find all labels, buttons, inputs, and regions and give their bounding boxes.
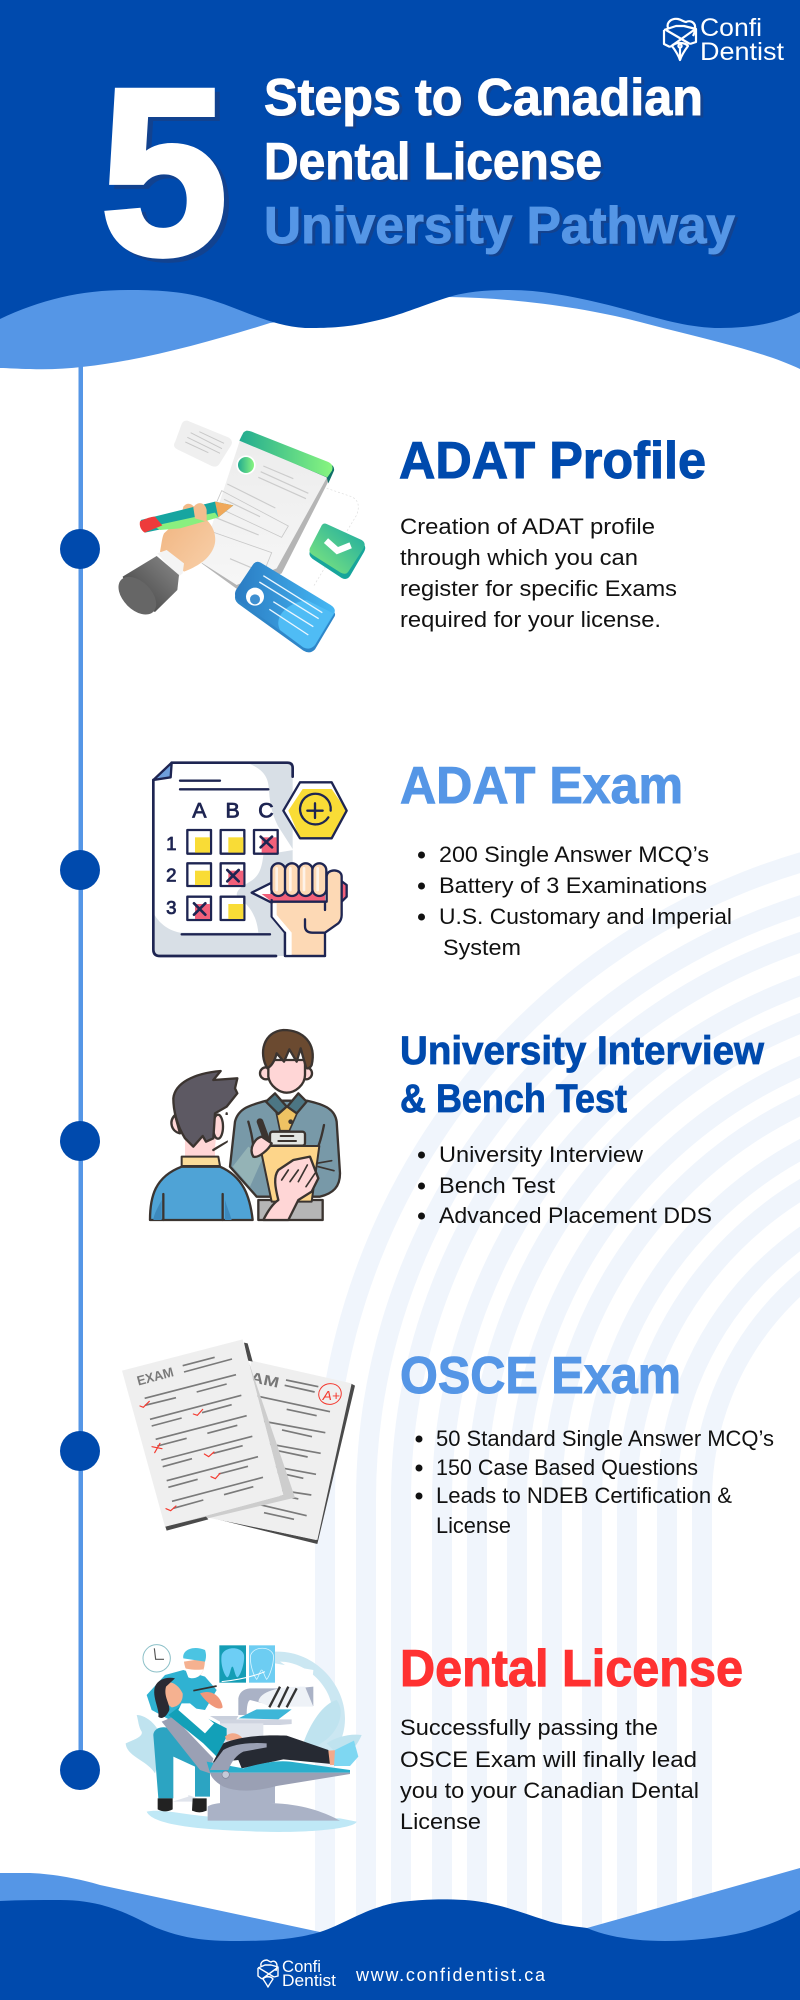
list: OSCE Exam details <box>416 1426 774 1538</box>
heading: University Interview & Bench Test: & Bench Test <box>400 1077 627 1121</box>
applicant body <box>150 1167 253 1220</box>
hand <box>160 504 215 572</box>
answer letters: A <box>192 798 207 822</box>
background: concentric arc stripes <box>325 835 800 2000</box>
chair back <box>162 1717 213 1773</box>
clipboard <box>260 1146 319 1202</box>
list: OSCE Exam details: 50 Standard Single Answer MCQ’s <box>436 1426 774 1451</box>
text: Dental License description: Successfully passing the <box>400 1715 658 1740</box>
front paper shadow <box>165 1361 295 1527</box>
text: ADAT Profile description: register for specific Exams <box>400 576 677 601</box>
applicant hair <box>173 1071 237 1147</box>
answer boxes <box>187 830 278 920</box>
heading: Dental License: Dental License <box>400 1640 743 1698</box>
patient legs <box>213 1735 332 1768</box>
timeline dot 4 <box>60 1431 100 1471</box>
unit arm <box>238 1687 313 1715</box>
floor shadow <box>147 1811 357 1832</box>
icon: tooth and pen nib <box>664 19 696 60</box>
text: ADAT Profile description: through which you can <box>400 545 638 570</box>
footer band <box>0 1899 800 2000</box>
applicant collar <box>182 1157 220 1166</box>
text: Dental License description: License <box>400 1809 481 1834</box>
text: Dental License description: you to your Canadian Dental <box>400 1778 699 1803</box>
chair post and base <box>220 1780 275 1803</box>
sleeve <box>123 556 179 612</box>
list: University Interview details: Bench Test <box>439 1173 555 1198</box>
logo: top: Dentist <box>700 38 784 66</box>
fingertip over pencil <box>193 503 207 522</box>
cuff <box>157 550 184 577</box>
pen and hand <box>260 1122 267 1140</box>
dentist legs and stool <box>173 1760 207 1802</box>
answer letters: B <box>226 798 240 822</box>
clock <box>143 1645 170 1672</box>
heading: University Interview & Bench Test <box>400 1029 765 1121</box>
icon: exam papers: EXAM <box>135 1364 175 1389</box>
heading: ADAT Profile: ADAT Profile <box>399 432 706 490</box>
icon: ADAT profile form <box>111 421 365 652</box>
icon: exam papers: AM <box>249 1370 281 1392</box>
heading: University Interview & Bench Test: University Interview <box>400 1029 765 1073</box>
title <box>264 69 735 255</box>
list: OSCE Exam details: License <box>436 1513 511 1538</box>
text: ADAT Profile description: Creation of ADAT profile <box>400 514 655 539</box>
icon: exam papers <box>122 1339 355 1544</box>
list: University Interview details: University Interview <box>439 1142 643 1167</box>
icon: ADAT exam sheet <box>153 763 347 956</box>
heading: ADAT Exam: ADAT Exam <box>400 757 683 815</box>
icon: dental clinic scene <box>126 1645 362 1832</box>
timeline dot 1 <box>60 529 100 569</box>
title: Steps to Canadian <box>264 69 703 127</box>
big numeral 5: 5 <box>100 40 228 305</box>
timeline dot 2 <box>60 850 100 890</box>
timeline dot 5 <box>60 1750 100 1790</box>
seat <box>207 1761 350 1773</box>
dentist head <box>184 1658 205 1677</box>
list: University Interview details: Advanced Placement DDS <box>439 1203 712 1228</box>
front paper edges <box>165 1343 253 1531</box>
interviewer head <box>260 1067 272 1079</box>
x-ray panels <box>219 1645 246 1683</box>
list: ADAT Exam details: System <box>443 935 521 960</box>
answer letters: 1 <box>166 833 177 854</box>
list: University Interview details <box>418 1142 712 1228</box>
text: Dental License description <box>400 1715 699 1834</box>
patient head <box>163 1682 183 1707</box>
check tile <box>309 526 365 579</box>
list: OSCE Exam details: Leads to NDEB Certification & <box>436 1483 732 1508</box>
timeline dot 3 <box>60 1121 100 1161</box>
blue card <box>235 565 335 652</box>
patient torso <box>168 1705 227 1757</box>
answer letters: C <box>258 798 274 822</box>
heading: OSCE Exam: OSCE Exam <box>400 1347 681 1405</box>
logo: top <box>664 14 784 66</box>
timeline <box>60 360 100 1790</box>
pencil <box>141 502 233 533</box>
icon: tooth and pen nib small <box>258 1960 278 1987</box>
fist and pencil <box>252 883 272 903</box>
list: ADAT Exam details: U.S. Customary and Imperial <box>439 904 732 929</box>
text: ADAT Profile description <box>400 514 677 632</box>
list: ADAT Exam details: Battery of 3 Examinations <box>439 873 707 898</box>
website url: www.confidentist.ca <box>355 1965 546 1985</box>
interviewer body <box>230 1101 340 1197</box>
back paper <box>207 1383 355 1544</box>
icon: university interview <box>150 1030 340 1220</box>
backdrop globe <box>275 1652 345 1753</box>
interviewer trousers <box>258 1200 323 1220</box>
leaves <box>126 1715 163 1773</box>
logo: footer: Confi <box>282 1957 321 1976</box>
dashed connector <box>313 488 358 587</box>
logo: footer <box>258 1957 336 1990</box>
text: ADAT Profile description: required for your license. <box>400 607 661 632</box>
list: ADAT Exam details <box>418 842 732 960</box>
icon: exam papers: A+ <box>322 1388 340 1403</box>
logo: footer: Dentist <box>282 1971 336 1990</box>
title: University Pathway <box>264 197 735 255</box>
list: ADAT Exam details: 200 Single Answer MCQ’s <box>439 842 709 867</box>
text: Dental License description: OSCE Exam will finally lead <box>400 1747 697 1772</box>
instrument tray <box>238 1709 292 1719</box>
answer letters: 3 <box>166 897 177 918</box>
shirt and collar <box>275 1107 300 1131</box>
hexagon badge <box>283 782 347 838</box>
title: Dental License <box>264 133 602 191</box>
paper <box>202 433 333 590</box>
top light wave <box>0 270 800 369</box>
bottom light wave <box>0 1868 800 1960</box>
grade circle <box>316 1381 344 1407</box>
note card <box>174 421 232 467</box>
answer letters <box>166 798 274 918</box>
applicant neck and ear <box>185 1137 227 1157</box>
answer letters: 2 <box>166 865 177 886</box>
light tube <box>222 1672 265 1682</box>
list: OSCE Exam details: 150 Case Based Questions <box>436 1455 698 1480</box>
applicant hand <box>263 1157 318 1220</box>
front paper <box>122 1339 283 1527</box>
dentist torso <box>147 1670 217 1720</box>
header band <box>0 0 800 328</box>
logo wordmark: Confi <box>700 14 762 42</box>
